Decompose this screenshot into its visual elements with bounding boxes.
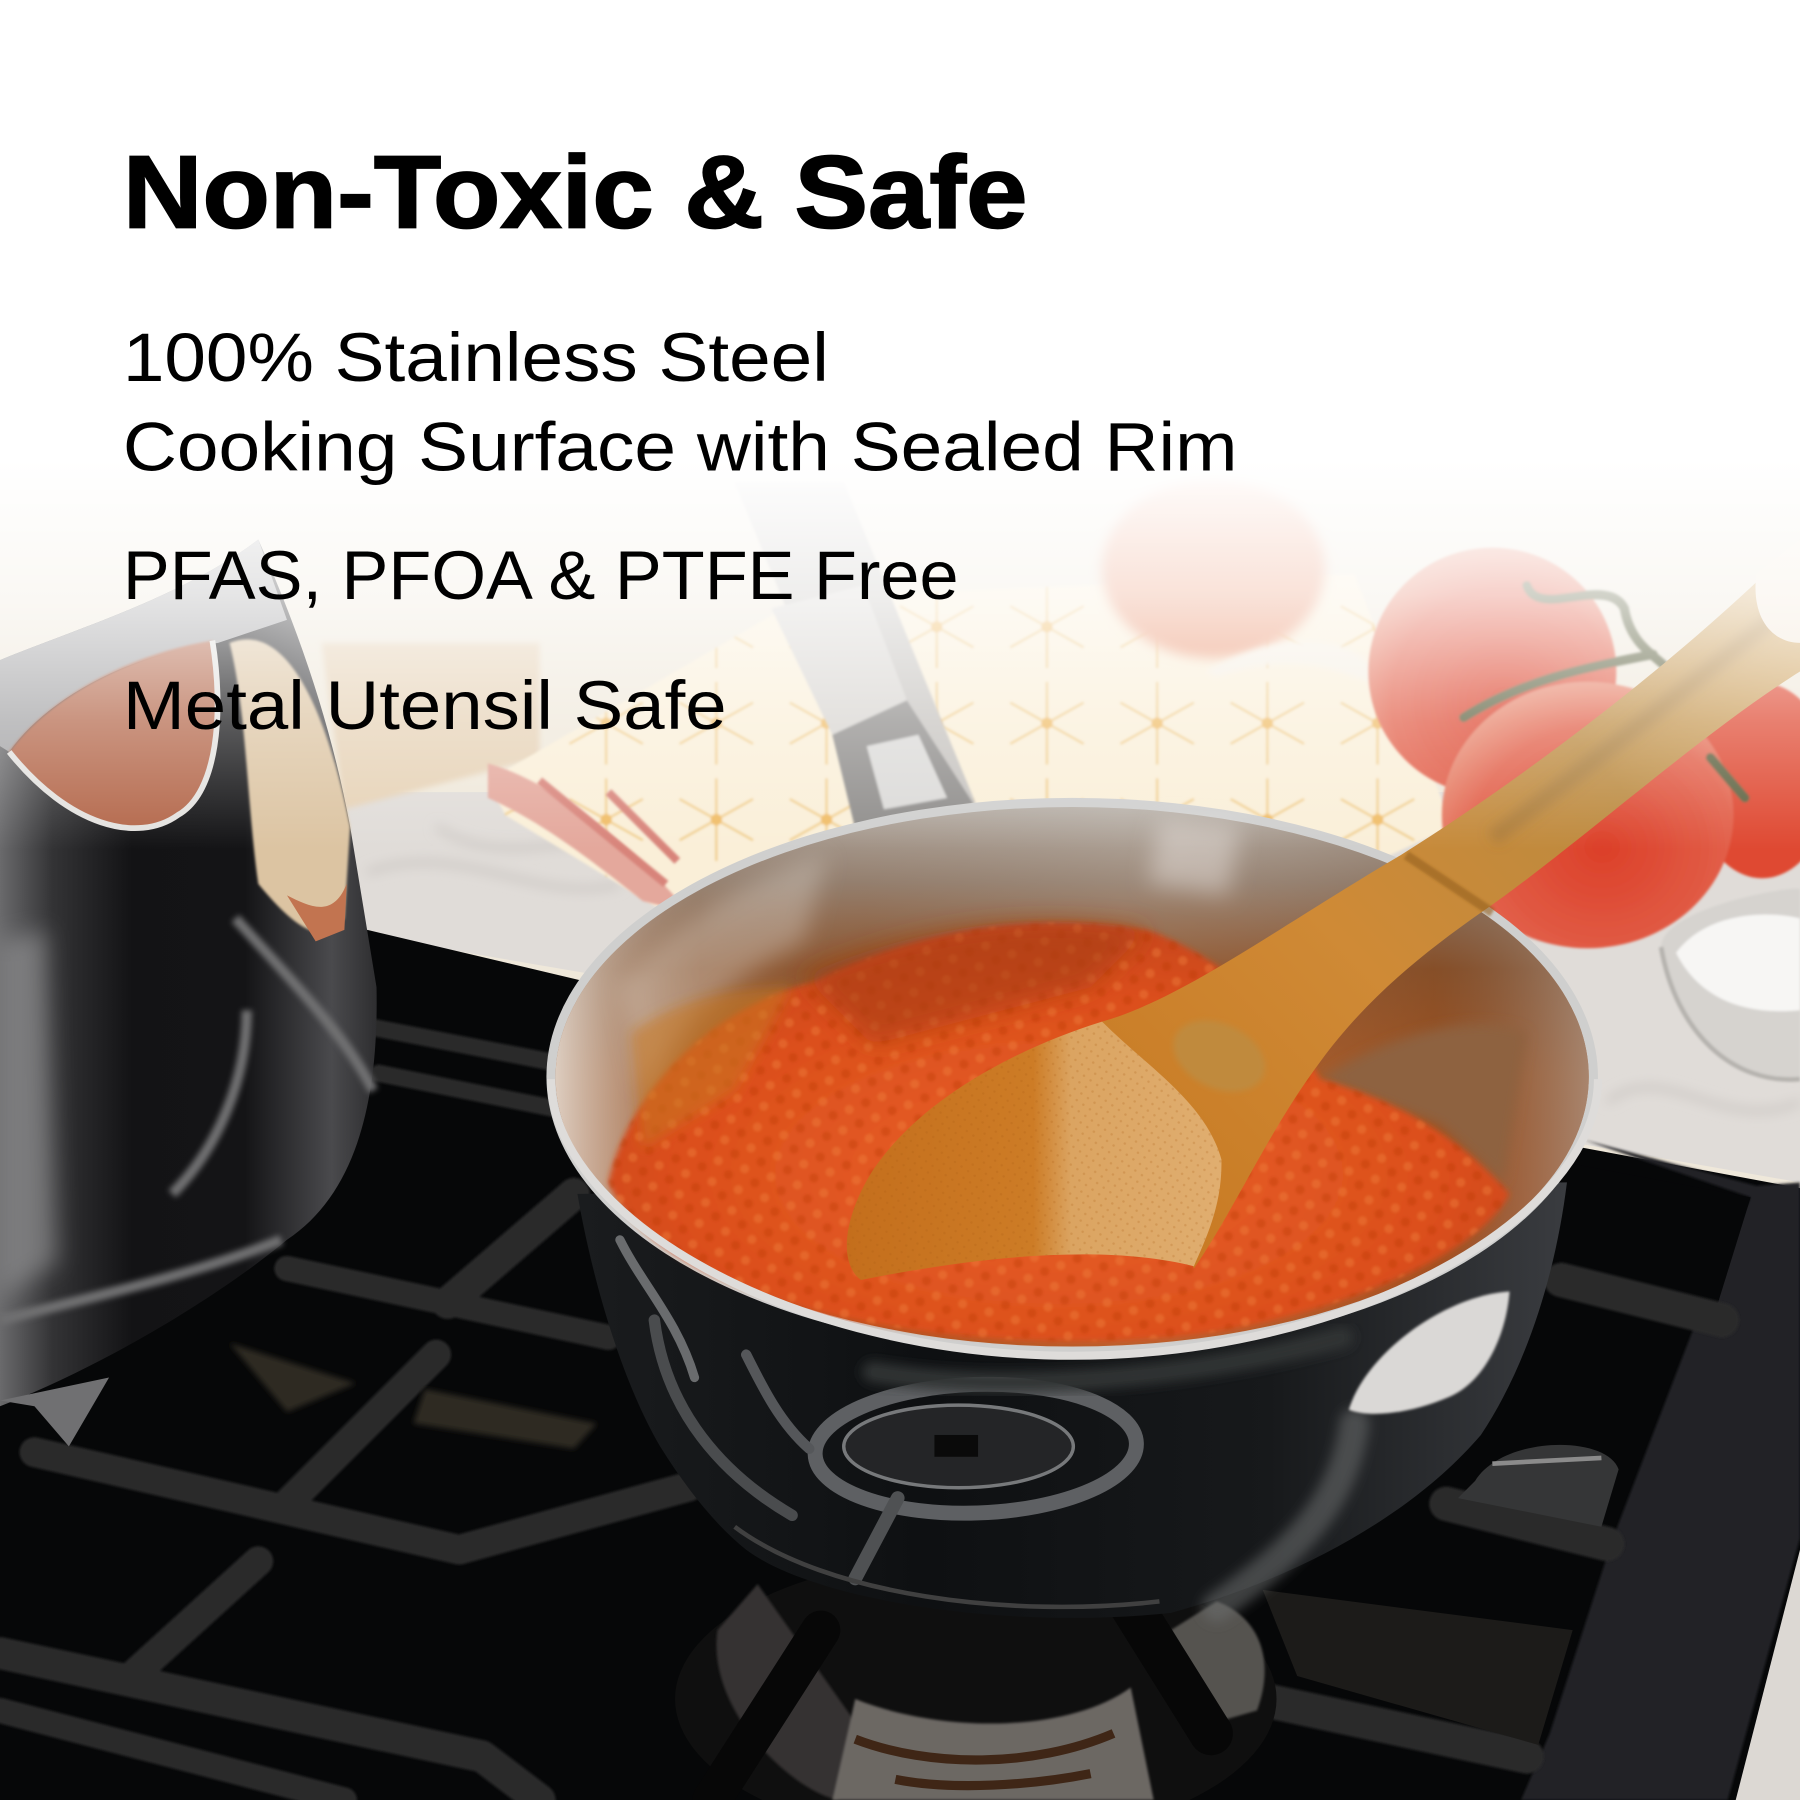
marble counter <box>344 792 1800 1182</box>
saucepan body <box>577 1182 1567 1618</box>
cooktop frame <box>1521 1140 1800 1800</box>
wooden spoon <box>847 540 1800 1280</box>
patterned towel <box>488 574 1452 913</box>
grate highlights <box>230 1343 597 1449</box>
tomatoes <box>1368 548 1800 948</box>
saucepan interior <box>546 798 1598 1356</box>
onion / egg <box>1102 479 1325 658</box>
cloth under tomatoes <box>1205 641 1389 689</box>
title: Non-Toxic & Safe <box>123 133 1027 249</box>
feature text: metal utensil safe: Metal Utensil Safe <box>123 667 727 744</box>
feature text: stainless steel: Cooking Surface with Sealed Rim <box>123 409 1238 486</box>
left kettle <box>0 540 377 1446</box>
feature text: stainless steel <box>123 319 1237 486</box>
saucepan handle <box>735 482 976 829</box>
tomato sauce <box>608 922 1510 1341</box>
burner support arms <box>712 1596 1211 1800</box>
burner <box>675 1445 1619 1800</box>
pan reflections <box>620 1240 1355 1607</box>
burner grates <box>0 1027 1722 1800</box>
salt bowl <box>1661 889 1800 1080</box>
pan rim front <box>551 1079 1598 1356</box>
interior metal glare <box>620 855 827 1091</box>
wooden board <box>321 643 540 809</box>
feature text: stainless steel: 100% Stainless Steel <box>123 319 829 396</box>
feature text: PFAS free: PFAS, PFOA & PTFE Free <box>123 537 959 614</box>
white fade overlay <box>0 0 1800 849</box>
cooktop <box>0 930 1800 1800</box>
